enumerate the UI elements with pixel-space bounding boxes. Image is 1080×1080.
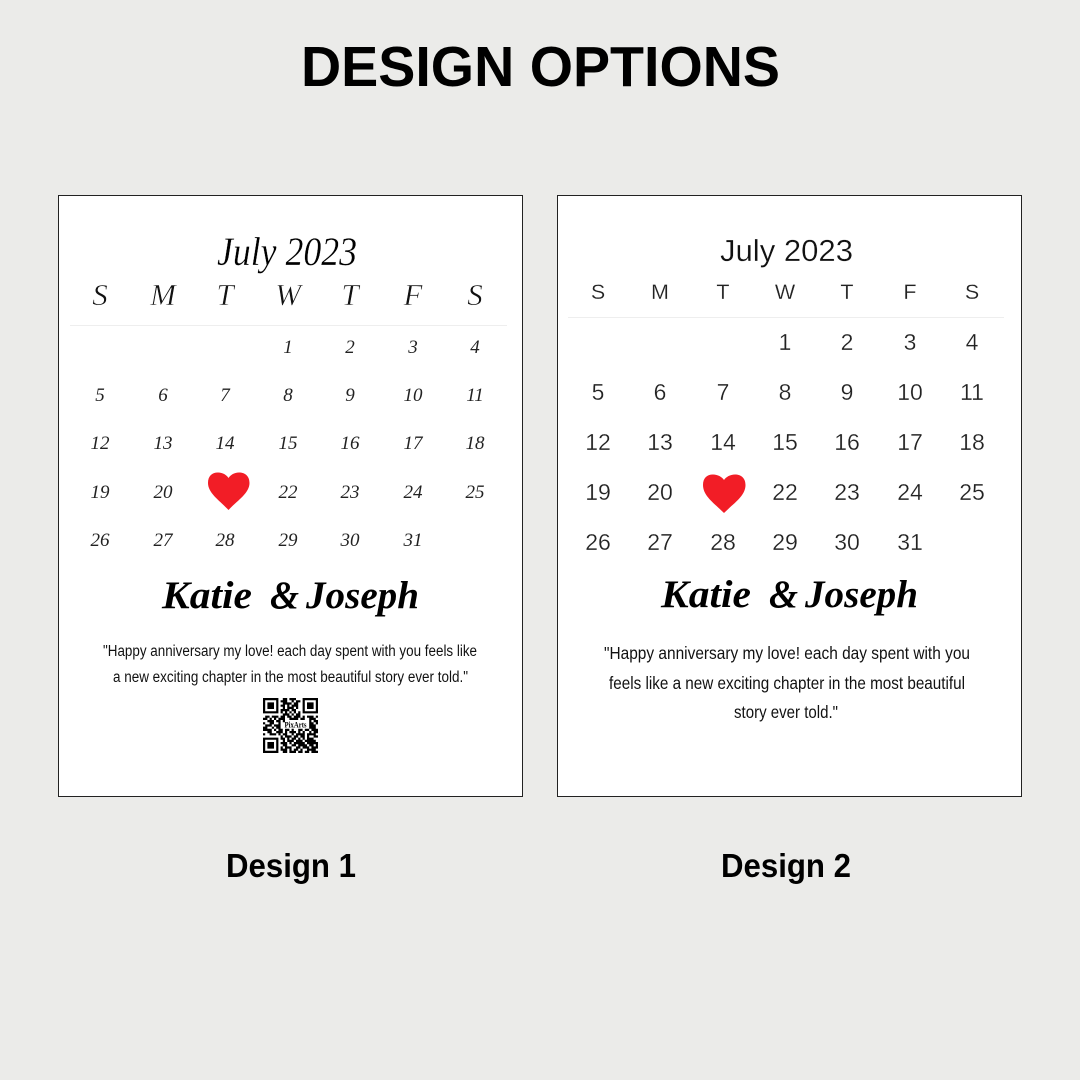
message: "Happy anniversary my love! each day spent with you [604, 643, 970, 663]
date grid: 18 [466, 433, 485, 454]
date grid: 25 [959, 479, 985, 505]
icon: red heart [208, 472, 250, 510]
weekday row: M [149, 277, 178, 312]
names: & [270, 574, 299, 617]
names: Katie [660, 573, 751, 616]
date grid: 6 [158, 385, 168, 406]
weekday row: T [840, 280, 854, 304]
date grid: 29 [278, 530, 298, 551]
QR code [263, 699, 318, 752]
weekday row: M [651, 280, 669, 304]
date grid: 10 [897, 379, 923, 405]
date grid: 23 [834, 479, 860, 505]
date grid: 9 [841, 379, 853, 405]
weekday row: W [275, 277, 304, 312]
message [604, 643, 970, 722]
date grid: 16 [834, 429, 860, 455]
names: Joseph [804, 573, 918, 616]
date grid: 24 [404, 482, 423, 503]
date grid: 15 [278, 433, 298, 454]
weekday row: F [903, 280, 917, 304]
date grid: 22 [772, 479, 798, 505]
weekday row: F [403, 277, 424, 312]
icon: red heart [703, 474, 746, 513]
date grid: 10 [404, 385, 423, 406]
weekday row: W [775, 280, 796, 304]
names [161, 574, 419, 617]
date grid: 2 [841, 329, 853, 355]
label: design 2: Design 2 [721, 847, 851, 884]
message: a new exciting chapter in the most beautiful story ever told." [113, 669, 468, 686]
date grid: 5 [95, 385, 105, 406]
title: DESIGN OPTIONS [301, 35, 780, 99]
date grid: 26 [585, 529, 611, 555]
date grid: 3 [904, 329, 916, 355]
date grid: 20 [154, 482, 173, 503]
message: story ever told." [734, 702, 838, 722]
message: "Happy anniversary my love! each day spent with you feels like [103, 643, 477, 660]
date grid: 24 [897, 479, 923, 505]
weekday row: S [965, 280, 979, 304]
date grid: 12 [585, 429, 611, 455]
date grid: 17 [404, 433, 424, 454]
date grid: 29 [772, 529, 798, 555]
date grid: 13 [154, 433, 172, 454]
date grid: 26 [90, 530, 110, 551]
date grid [90, 337, 485, 551]
date grid: 5 [592, 379, 604, 405]
QR code: PixArts [285, 720, 307, 729]
date grid: 11 [960, 379, 984, 405]
date grid: 12 [90, 433, 110, 454]
date grid: 3 [407, 337, 418, 358]
date grid: 20 [647, 479, 673, 505]
weekday row [591, 280, 979, 304]
date grid: 27 [647, 529, 673, 555]
weekday row: S [467, 277, 483, 312]
date grid: 7 [717, 379, 729, 405]
weekday row [92, 277, 483, 312]
date grid: 23 [340, 482, 360, 503]
date grid: 22 [278, 482, 298, 503]
weekday row: T [216, 277, 236, 312]
date grid: 19 [585, 479, 611, 505]
names: & [769, 573, 798, 616]
date grid: 14 [216, 433, 235, 454]
names: Katie [161, 574, 252, 617]
weekday row: S [591, 280, 605, 304]
date grid: 19 [90, 482, 110, 503]
weekday row: S [92, 277, 108, 312]
date grid: 11 [466, 385, 484, 406]
date grid: 16 [340, 433, 360, 454]
names: Joseph [305, 574, 419, 617]
date grid: 30 [834, 529, 860, 555]
weekday row: T [341, 277, 361, 312]
date grid: 2 [345, 337, 355, 358]
panel: design 2 [558, 196, 1022, 796]
date grid: 31 [402, 530, 422, 551]
date grid [585, 329, 985, 555]
date grid: 1 [283, 337, 293, 358]
month heading: July 2023 [720, 233, 853, 268]
month heading: July 2023 [217, 229, 357, 274]
date grid: 14 [710, 429, 736, 455]
date grid: 7 [220, 385, 231, 406]
panel: design 1 [58, 196, 522, 796]
date grid: 6 [654, 379, 666, 405]
date grid: 4 [470, 337, 480, 358]
date grid: 17 [897, 429, 923, 455]
names [660, 573, 918, 616]
date grid: 1 [779, 329, 791, 355]
date grid: 28 [710, 529, 736, 555]
date grid: 31 [897, 529, 923, 555]
message: feels like a new exciting chapter in the most beautiful [609, 673, 965, 693]
date grid: 25 [466, 482, 484, 503]
label: design 1: Design 1 [226, 847, 356, 884]
date grid: 30 [340, 530, 360, 551]
date grid: 8 [779, 379, 791, 405]
date grid: 27 [154, 530, 174, 551]
date grid: 15 [772, 429, 798, 455]
message [103, 643, 477, 686]
date grid: 28 [216, 530, 235, 551]
weekday row: T [716, 280, 730, 304]
date grid: 18 [959, 429, 985, 455]
date grid: 13 [647, 429, 673, 455]
date grid: 4 [966, 329, 979, 355]
date grid: 8 [283, 385, 293, 406]
date grid: 9 [345, 385, 355, 406]
